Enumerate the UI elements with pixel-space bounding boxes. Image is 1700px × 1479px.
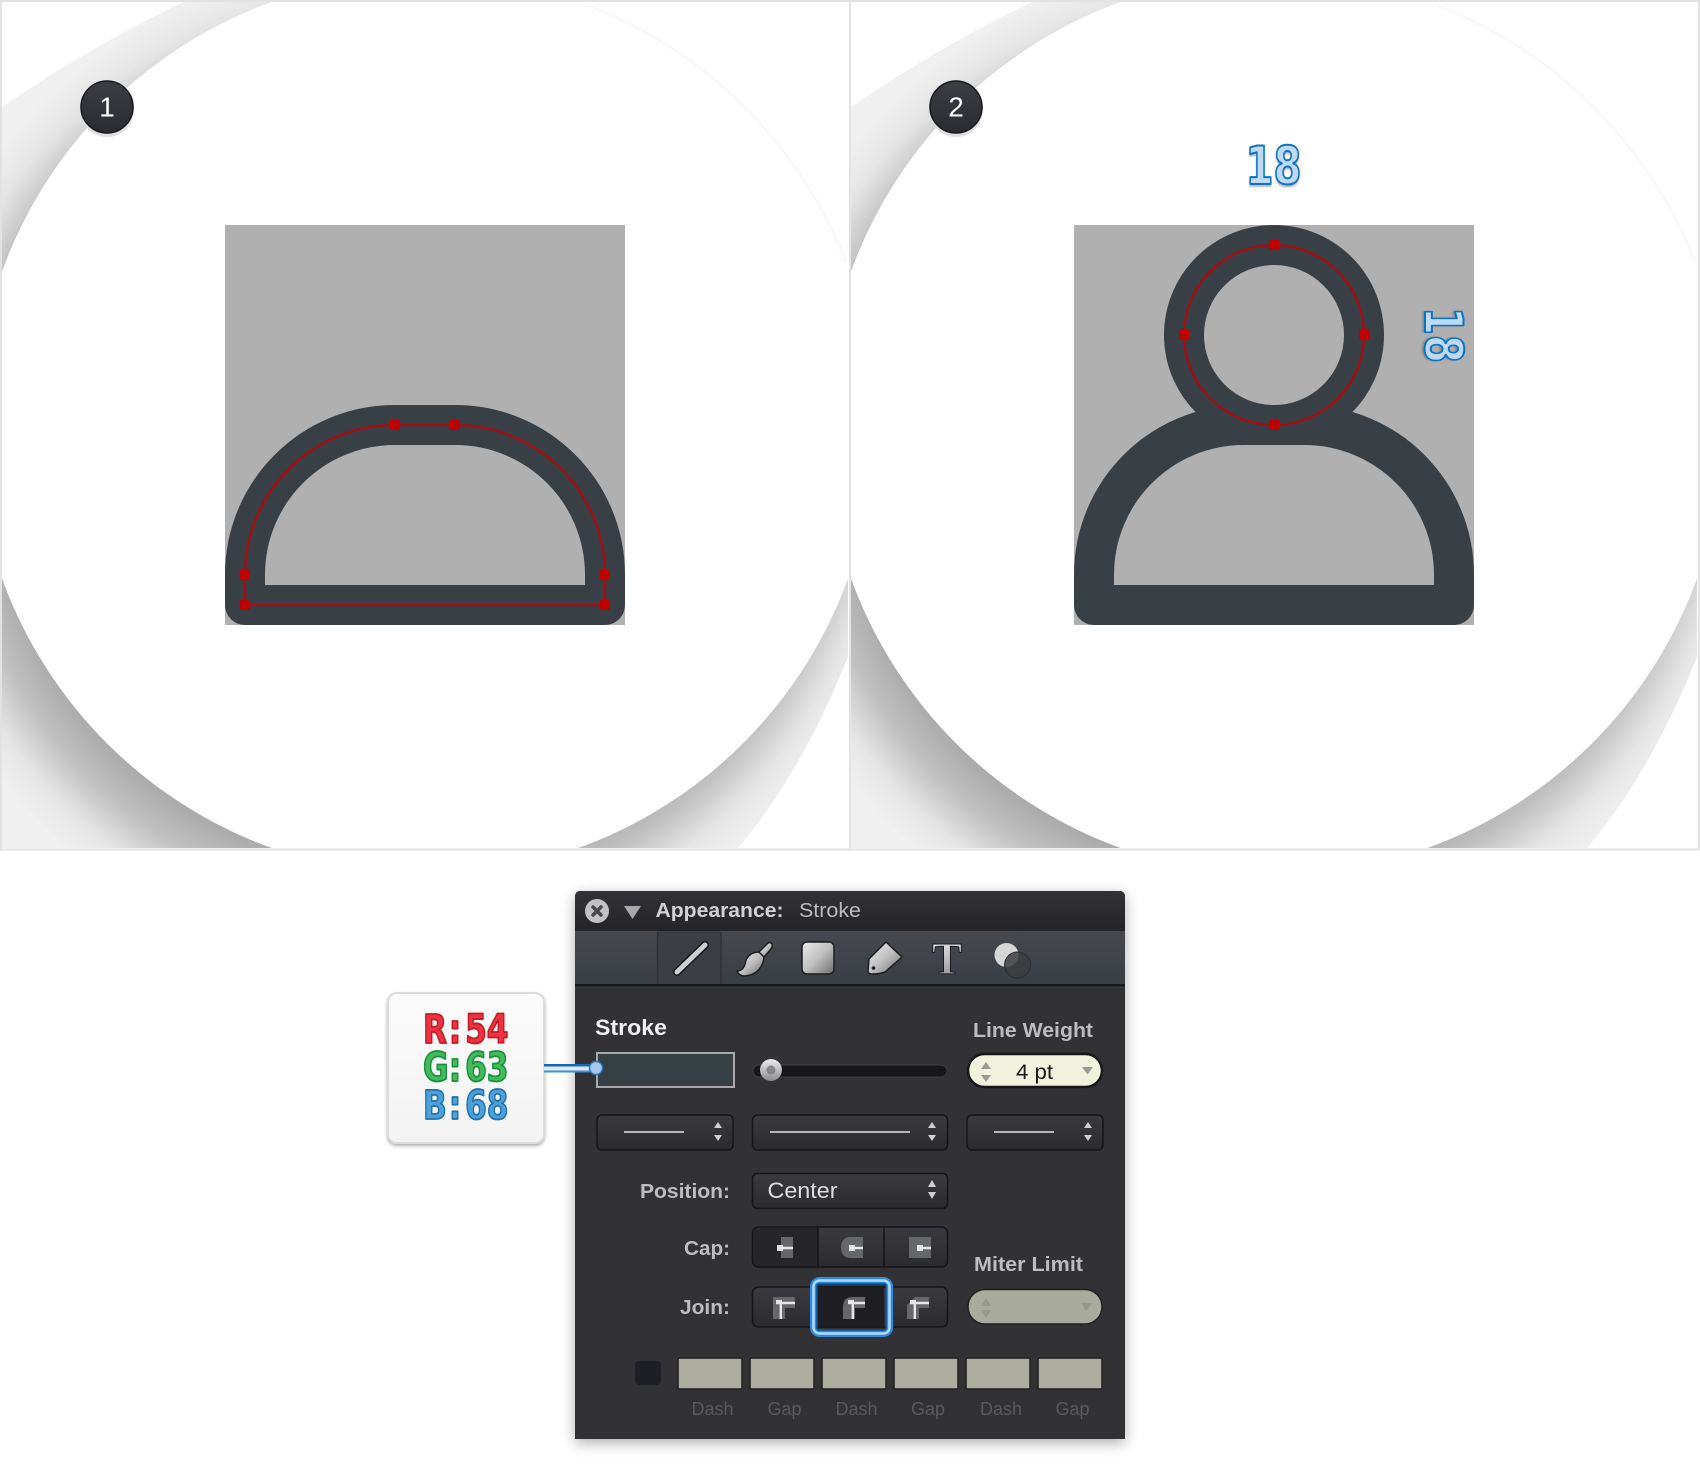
- shoulders shape stroke: [245, 425, 605, 605]
- dash and gap fields: Gap: [911, 1399, 945, 1419]
- step number badge 2: [929, 81, 983, 137]
- Cap row: Cap:: [684, 1238, 730, 1260]
- dash and gap fields: Gap: [1055, 1399, 1090, 1419]
- connector from callout to swatch: [544, 1062, 602, 1074]
- icon: butt cap: [777, 1237, 793, 1258]
- callout: RGB color values: R:54: [423, 1007, 509, 1053]
- icon: bevel join: [907, 1297, 929, 1319]
- callout: RGB color values: [388, 993, 544, 1143]
- slider: [753, 1059, 947, 1081]
- icon: overlapping circles: [994, 943, 1030, 978]
- icon: miter join: [773, 1297, 795, 1319]
- line weight field: 4 pt: [1016, 1061, 1053, 1084]
- Miter Limit label: Miter Limit: [974, 1254, 1083, 1276]
- panel borders: [0, 0, 1700, 850]
- Join row: [680, 1280, 948, 1334]
- Line Weight label: Line Weight: [973, 1020, 1093, 1042]
- dimension label: height 18: 18: [1412, 307, 1473, 363]
- Stroke label: Stroke: [595, 1015, 667, 1040]
- Position row: Center: [768, 1178, 838, 1203]
- title bar: [575, 891, 1125, 931]
- toolbar: [575, 931, 1125, 988]
- red path with anchor points: [240, 420, 610, 610]
- Appearance panel: [544, 891, 1125, 1439]
- callout: RGB color values: B:68: [423, 1083, 509, 1129]
- person body and head stroke: [1094, 245, 1454, 605]
- Join row: Join:: [680, 1297, 730, 1319]
- title bar: Stroke: [799, 900, 861, 922]
- icon: round join: [843, 1297, 865, 1319]
- panel: step 2 person icon: [824, 0, 1700, 875]
- icon: fill square: [802, 942, 834, 974]
- dash and gap fields: [678, 1358, 1102, 1419]
- icon: type T: T: [932, 934, 962, 984]
- step number badge 1: 1: [99, 92, 115, 122]
- panel: step 1 half-dome shape: [0, 0, 875, 875]
- icon: round cap: [841, 1237, 863, 1258]
- dash and gap fields: Gap: [767, 1399, 802, 1419]
- callout: RGB color values: G:63: [423, 1045, 509, 1091]
- step number badge 1: [80, 81, 134, 137]
- title bar: Appearance:: [656, 900, 784, 922]
- line style dropdowns: [597, 1115, 1103, 1150]
- dash and gap fields: Dash: [980, 1399, 1022, 1419]
- Cap row: [684, 1227, 948, 1267]
- stroke colour swatch: [597, 1053, 734, 1087]
- step number badge 2: 2: [948, 92, 964, 122]
- disabled miter limit field: [968, 1290, 1102, 1324]
- dash and gap fields: Dash: [691, 1399, 734, 1419]
- icon: projecting cap: [909, 1237, 931, 1258]
- dashed line checkbox: [635, 1361, 661, 1385]
- Position row: [640, 1174, 948, 1208]
- icon: stroke line: [677, 945, 705, 972]
- Position row: Position:: [640, 1181, 730, 1203]
- icon: brush: [737, 943, 772, 976]
- red head path with anchor points: [1179, 240, 1369, 430]
- dash and gap fields: Dash: [835, 1399, 878, 1419]
- line weight field: [968, 1054, 1102, 1087]
- dimension label: width 18: 18: [1246, 136, 1302, 197]
- icon: tag: [868, 942, 902, 974]
- selected join highlight: [814, 1280, 890, 1334]
